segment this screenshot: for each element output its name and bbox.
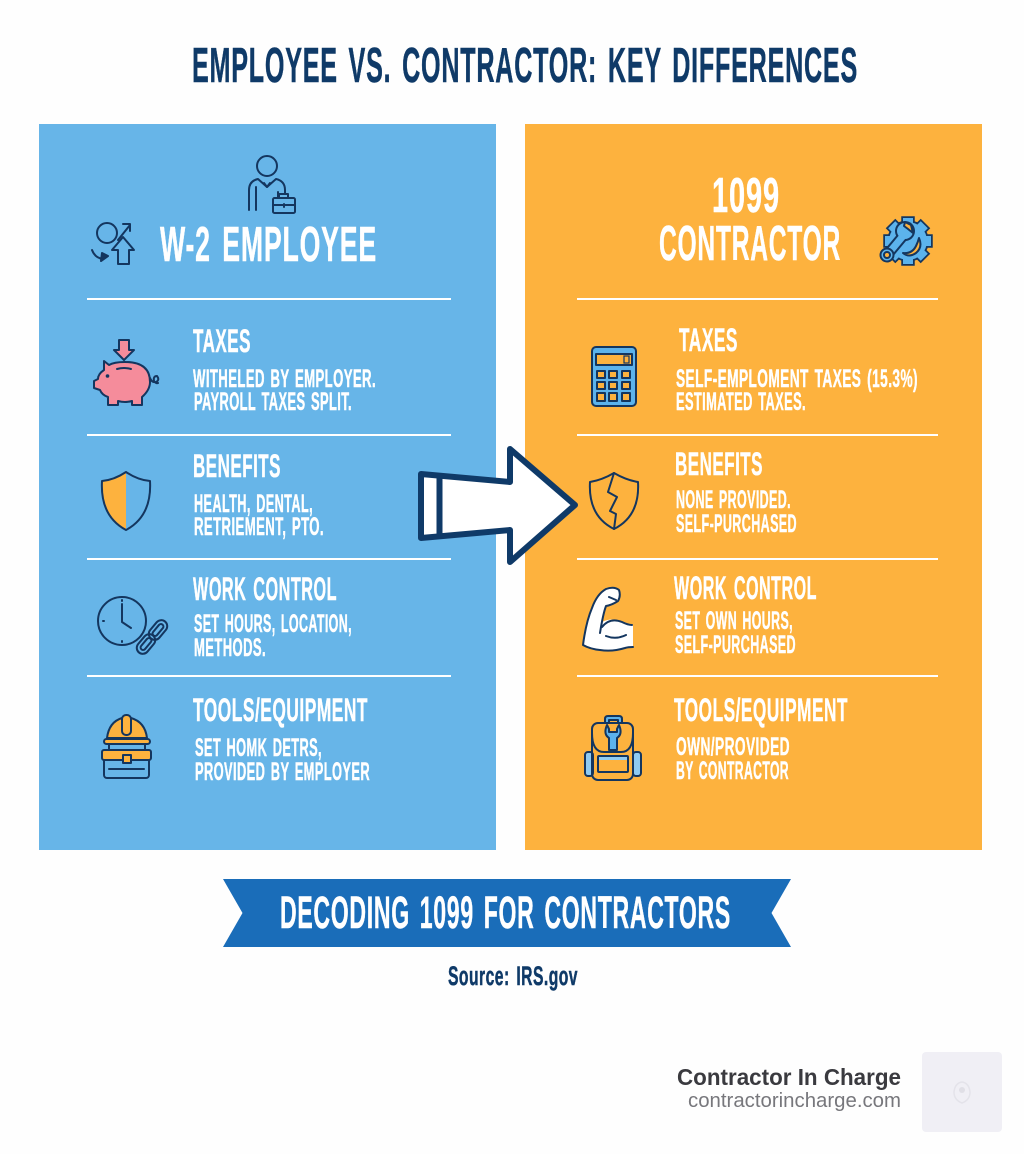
text: taxes xyxy=(676,322,918,416)
text: benefits: BENEFITS xyxy=(675,446,763,482)
text: benefits: HEALTH, DENTAL, xyxy=(194,490,313,518)
banner: decoding 1099 xyxy=(223,879,791,947)
text: benefits xyxy=(193,448,324,541)
heading: 1099 contractor: 1099 xyxy=(712,169,780,223)
panel background: orange xyxy=(525,124,982,850)
icon: half-filled shield xyxy=(102,472,150,530)
row: work control xyxy=(98,571,352,662)
text: benefits: RETRIEMENT, PTO. xyxy=(194,513,324,541)
brand name: Contractor In Charge xyxy=(677,1064,901,1090)
panel: W-2 employee: SET HOURS, LOCATION, xyxy=(194,610,352,638)
text: tools and equipment xyxy=(674,692,848,785)
text: tools and equipment: BY CONTRACTOR xyxy=(676,757,789,785)
text: benefits xyxy=(675,446,797,538)
row: benefits xyxy=(102,448,324,541)
text: benefits: BENEFITS xyxy=(193,448,281,484)
text: taxes xyxy=(193,323,376,416)
row: taxes xyxy=(592,322,918,416)
text: taxes: WITHELED BY EMPLOYER. xyxy=(193,365,376,393)
row: taxes xyxy=(94,323,376,416)
icon: gear and wrench xyxy=(880,218,931,264)
panel: 1099 contractor xyxy=(525,124,982,850)
panel background: blue xyxy=(39,124,496,850)
text: tools and equipment: SET HOMK DETRS, xyxy=(195,734,322,762)
icon: shield with lightning crack xyxy=(590,473,638,529)
heading: W-2 employee: W-2 EMPLOYEE xyxy=(160,218,377,272)
row: tools and equipment xyxy=(102,692,370,786)
text: work control: METHODS. xyxy=(194,634,266,662)
text: taxes: ESTIMATED TAXES. xyxy=(676,388,806,416)
text: benefits: SELF-PURCHASED xyxy=(676,510,797,538)
heading: 1099 contractor xyxy=(659,169,841,271)
brand URL: contractorincharge.com xyxy=(688,1090,901,1112)
icon: flexed arm xyxy=(583,588,633,651)
text: work control: SELF-PURCHASED xyxy=(675,631,796,659)
icon: role change arrows xyxy=(92,223,134,264)
icon: piggy bank xyxy=(94,340,158,405)
text: tools and equipment: OWN/PROVIDED xyxy=(676,733,790,761)
text: taxes: TAXES xyxy=(193,323,251,359)
arrow: employee to contractor xyxy=(421,449,575,562)
text: tools and equipment: TOOLS/EQUIPMENT xyxy=(674,692,848,728)
text: benefits: NONE PROVIDED. xyxy=(676,486,791,514)
text: tools and equipment: TOOLS/EQUIPMENT xyxy=(193,692,368,728)
text: taxes: PAYROLL TAXES SPLIT. xyxy=(194,388,352,416)
panel: W-2 employee xyxy=(39,124,496,850)
icon: employee with briefcase xyxy=(249,156,295,213)
logo tile xyxy=(922,1052,1002,1132)
row: benefits xyxy=(590,446,797,538)
row: work control xyxy=(583,570,817,659)
icon: hard hat on toolbox xyxy=(102,715,151,778)
icon: backpack with wrench xyxy=(585,716,641,780)
footer: brand xyxy=(677,1052,1002,1132)
text: tools and equipment xyxy=(193,692,370,786)
icon: calculator xyxy=(592,347,636,406)
text: work control: SET OWN HOURS, xyxy=(675,607,793,635)
heading: 1099 contractor: CONTRACTOR xyxy=(659,217,841,271)
text: work control: WORK CONTROL xyxy=(193,571,337,607)
text: work control: WORK CONTROL xyxy=(674,570,817,606)
source note: Source: IRS.gov xyxy=(448,961,578,991)
text: taxes: TAXES xyxy=(679,322,738,358)
text: tools and equipment: PROVIDED BY EMPLOYER xyxy=(195,758,370,786)
text: work control xyxy=(193,571,352,662)
text: work control xyxy=(674,570,817,659)
icon: clock and chain link xyxy=(98,597,170,656)
row: tools and equipment xyxy=(585,692,848,785)
